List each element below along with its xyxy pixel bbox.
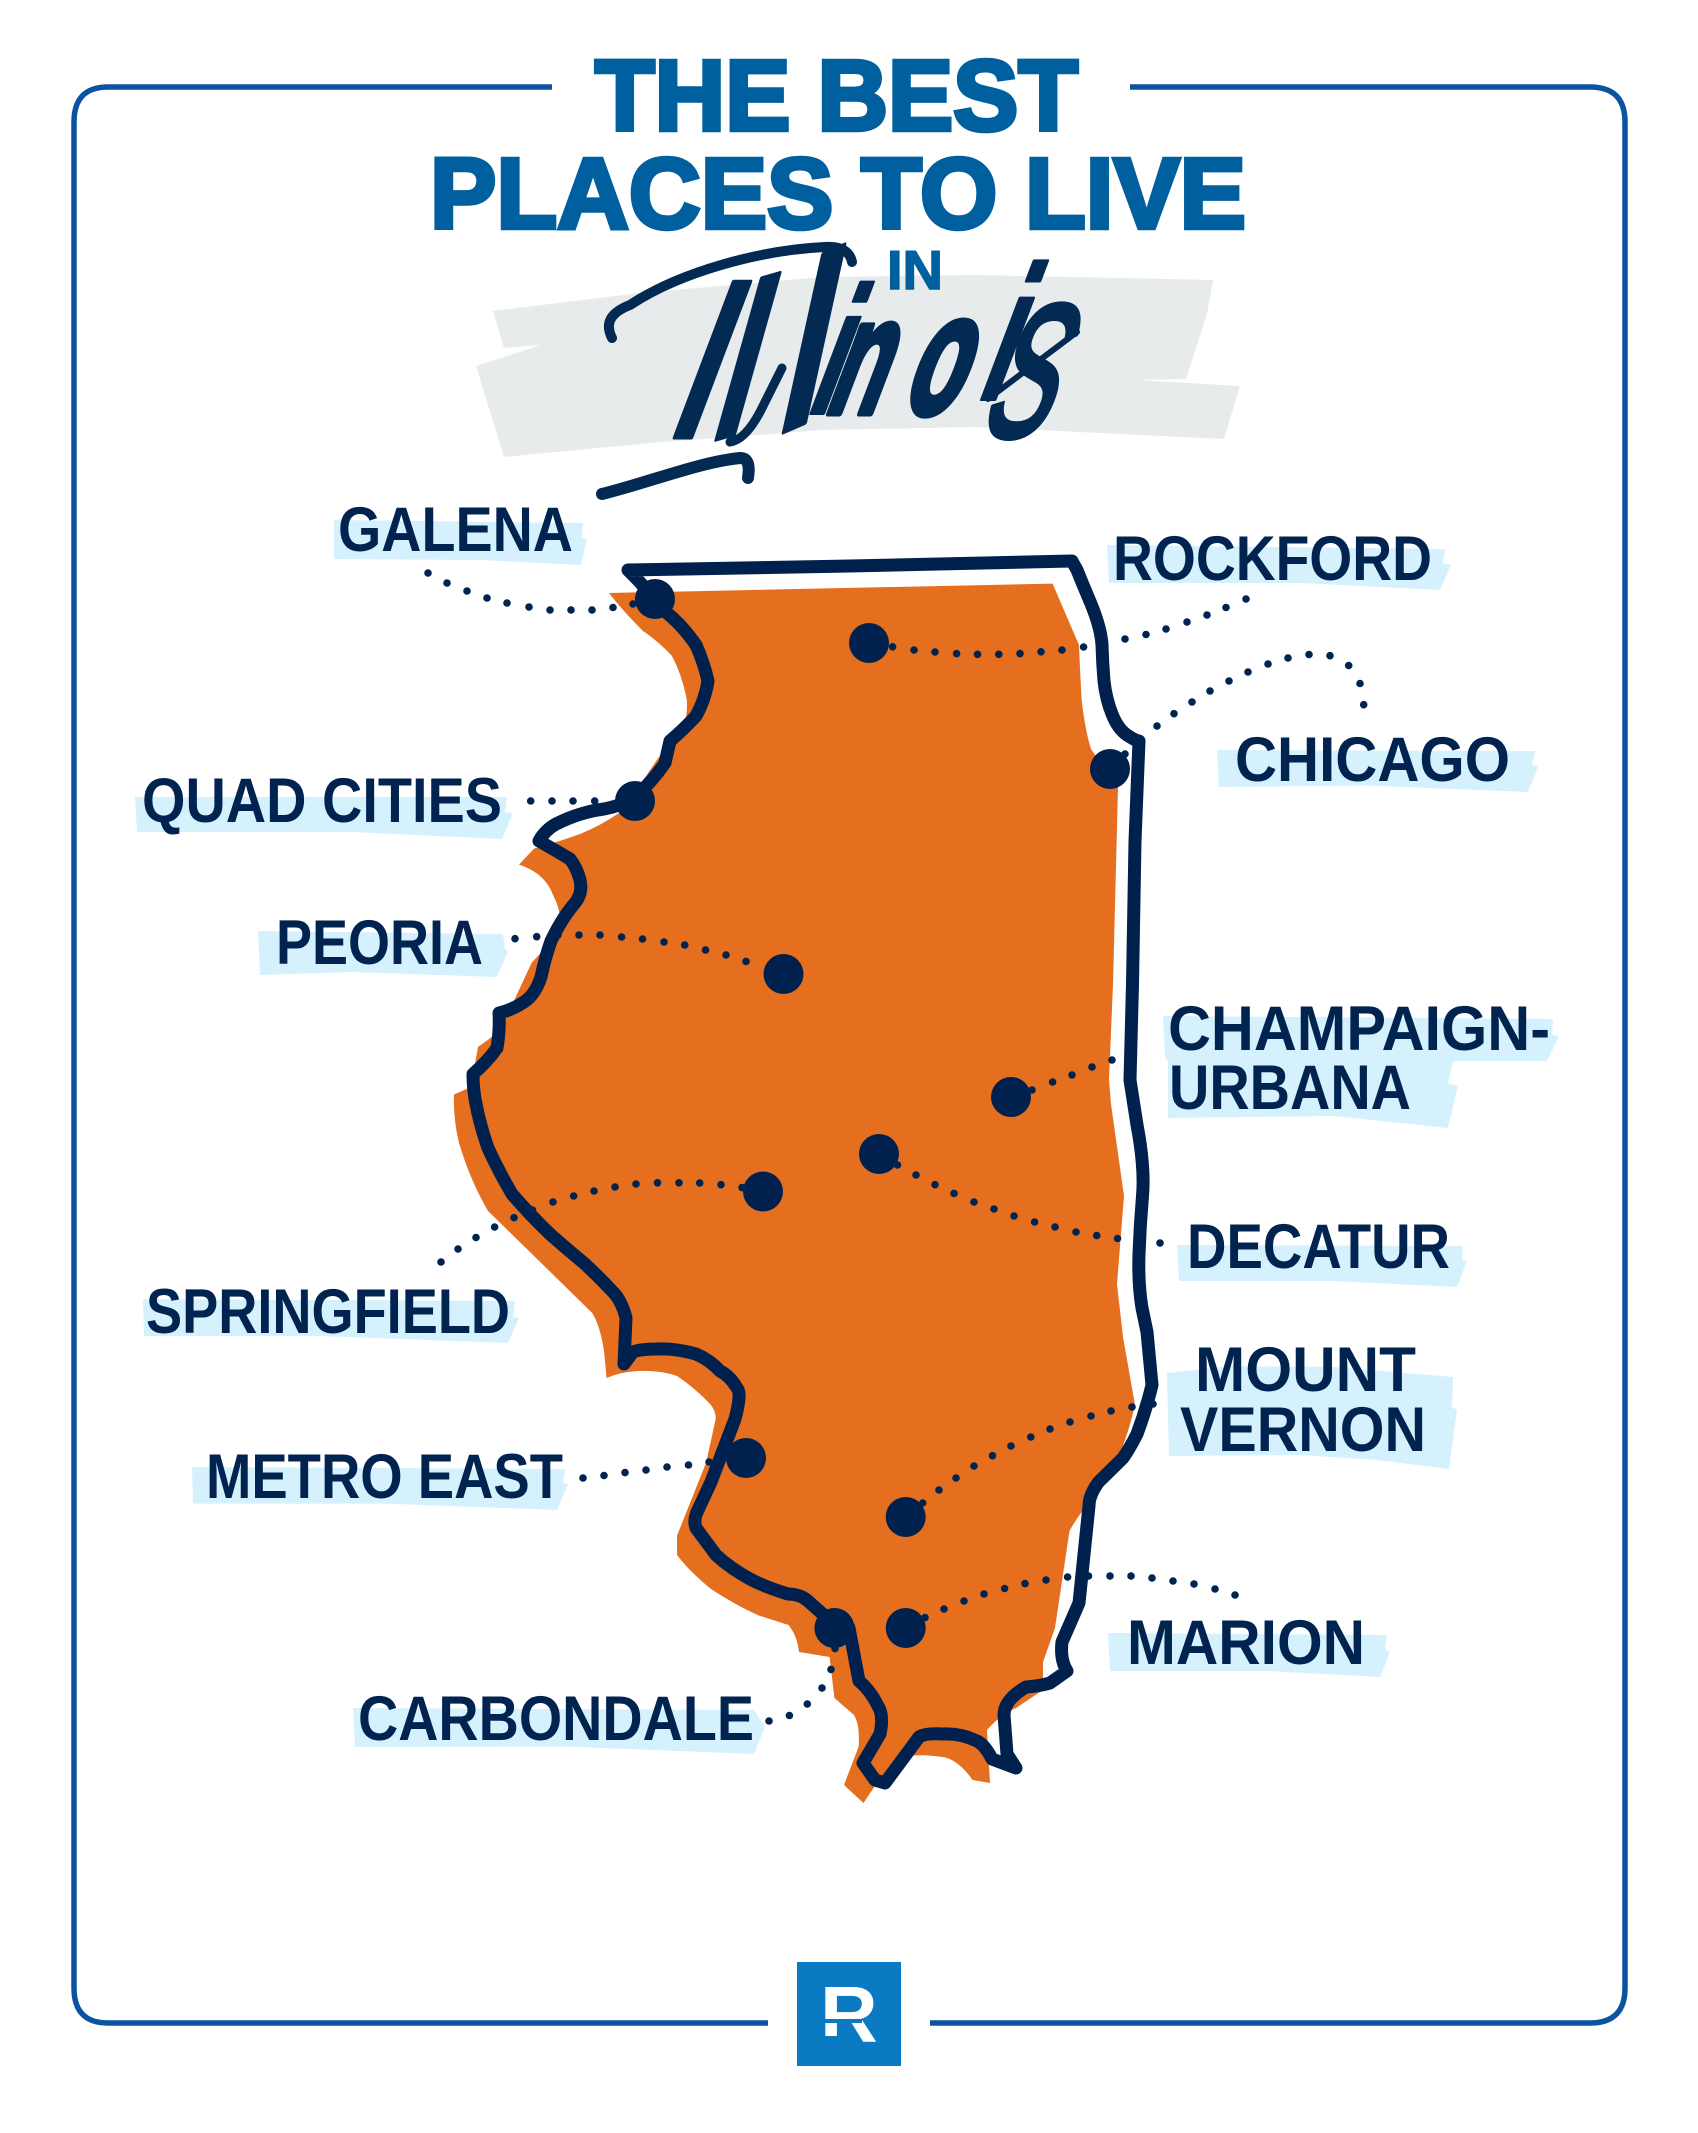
brush swash behind script — [476, 275, 1240, 457]
label: Carbondale: CARBONDALE — [358, 1684, 754, 1754]
label: Peoria: PEORIA — [276, 908, 483, 978]
label: Springfield: SPRINGFIELD — [146, 1277, 510, 1347]
label: Decatur: DECATUR — [1187, 1212, 1450, 1282]
heading: title: PLACES TO LIVE — [430, 138, 1246, 250]
label: Mount Vernon: VERNON — [1180, 1395, 1426, 1465]
heading: title: THE BEST — [595, 40, 1078, 152]
heading: Illinois script — [602, 196, 1136, 494]
label: Quad Cities: QUAD CITIES — [142, 766, 502, 836]
label: Mount Vernon: MOUNT — [1195, 1335, 1416, 1405]
heading: Illinois script: i — [959, 228, 1068, 440]
label: Metro East: METRO EAST — [206, 1442, 563, 1512]
heading: Illinois script: n — [809, 264, 934, 448]
label: Marion: MARION — [1127, 1608, 1365, 1678]
logo: Ramsey R: R — [820, 1970, 878, 2059]
label: Champaign-Urbana — [1163, 994, 1559, 1128]
heading: Illinois script: s — [956, 212, 1130, 491]
heading: IN: IN — [887, 239, 943, 301]
heading: Illinois script: l — [669, 231, 825, 489]
label: Champaign-Urbana: URBANA — [1169, 1053, 1411, 1123]
state outline — [473, 561, 1152, 1783]
heading: Illinois script: o — [885, 259, 1014, 449]
label: Champaign-Urbana: CHAMPAIGN- — [1168, 994, 1550, 1064]
label: Mount Vernon — [1167, 1335, 1457, 1469]
city markers — [615, 579, 1130, 1648]
label: Chicago: CHICAGO — [1235, 725, 1510, 795]
leader lines: dotted connectors — [428, 573, 1364, 1721]
map: Illinois — [454, 561, 1152, 1803]
heading: Illinois script: l — [718, 196, 909, 489]
label: Rockford: ROCKFORD — [1113, 524, 1432, 594]
heading: title — [430, 40, 1246, 250]
label: Galena: GALENA — [338, 495, 573, 565]
state fill — [454, 584, 1135, 1803]
heading: Illinois script: I — [648, 233, 777, 485]
logo: Ramsey R — [797, 1962, 901, 2066]
heading: Illinois script: i — [789, 251, 893, 452]
